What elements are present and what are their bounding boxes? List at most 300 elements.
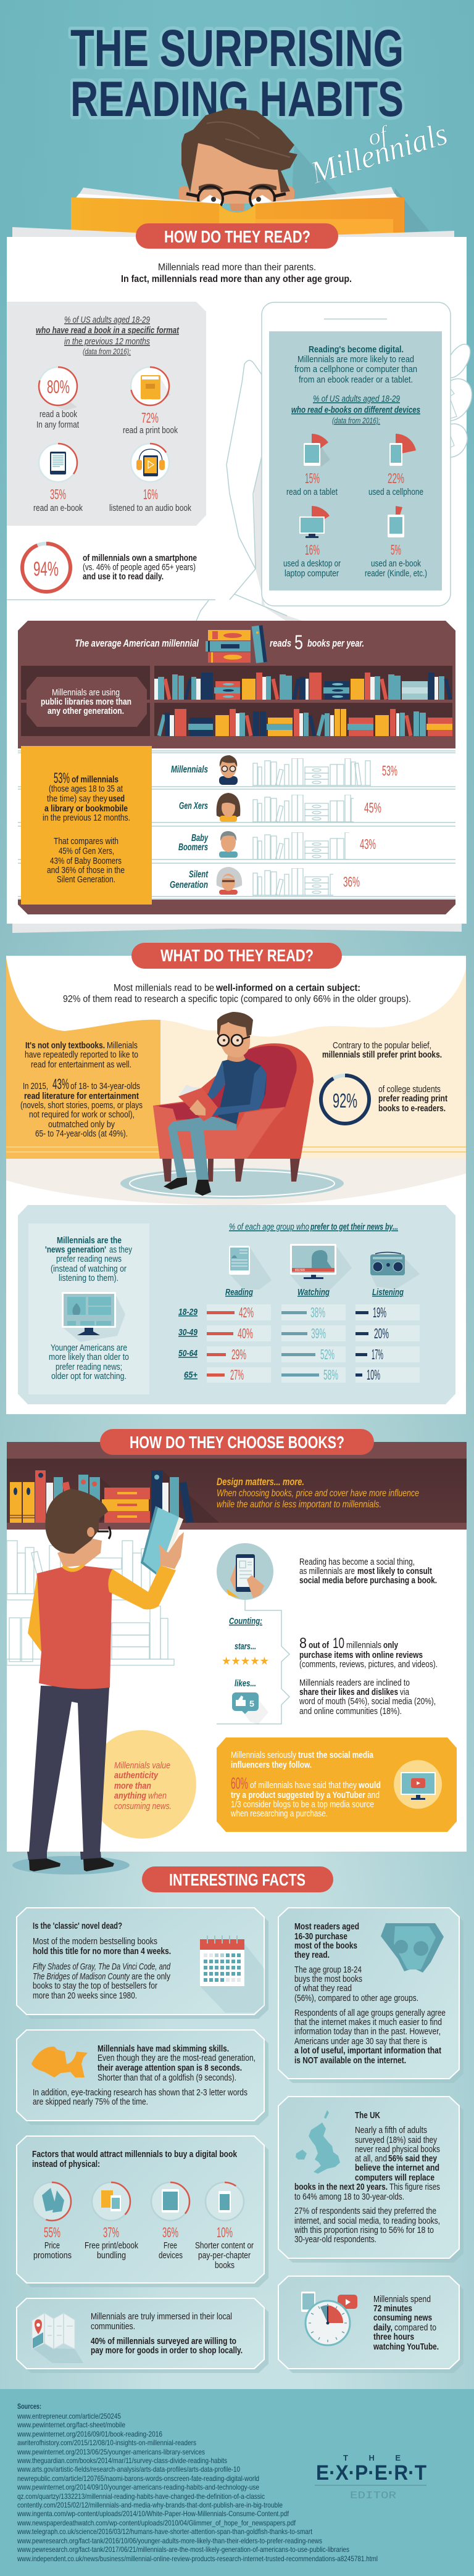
panel: local communities: communities. [91,2321,135,2332]
factor: bundling 37%: 37% [103,2224,119,2240]
text box: news generation: more likely than older to [49,1352,129,1362]
stat: desktop 16%: 16% [305,542,320,558]
callout: public libraries [27,677,147,727]
chart: news preference by age: 58% [323,1367,338,1383]
panel: news consumption time: compared to [394,2322,436,2333]
icon: reading tablet: Reading [225,1287,253,1298]
chart: news preference by age: 18-29 [178,1307,198,1317]
text: online reviews: 8 [299,1635,307,1652]
row: gen xers 45%: 45% [364,800,381,816]
text: print books: Contrary to the popular belief, [333,1040,431,1051]
text box: news generation: prefer reading news; [56,1362,122,1372]
stat: audio book 16%: 16% [143,486,158,502]
subtitle: of Millennials: of [365,121,393,151]
factor: bundling 37%: Free print/ebook [85,2240,138,2251]
counting: stars and likes [222,1616,269,1725]
panel: the UK: books in the next 20 years. [294,2182,388,2192]
illustration: man holding a book [12,1489,184,1874]
panel: the UK: believe the internet and [355,2163,439,2173]
section heading: how do they choose books: HOW DO THEY CHOOSE BOOKS? [130,1433,344,1452]
stat: desktop 16% [283,506,341,579]
text: entertainment reading: have repeatedly reported to like to [25,1050,138,1060]
icon: calendar [200,1936,264,2013]
text: entertainment reading [20,1040,143,1139]
text: online reviews: purchase items with online reviews [299,1650,423,1660]
icon: goldfish [31,2047,88,2077]
row: silent generation 36% [170,867,371,895]
panel: the UK: 27% of respondents said they preferred the [294,2206,436,2216]
panel: how do they read [7,223,467,933]
panel: classic novel: Is the 'classic' novel dead? [33,1921,122,1931]
factor: shorter content 10%: books [215,2260,235,2271]
text: online reviews: millennials [346,1640,381,1650]
counting: stars and likes: likes... [235,1678,256,1689]
panel: who purchases books [278,1908,464,2083]
intro text: 92% of them read to research a specific topic (compared to only 66% in the older groups). [63,994,411,1004]
factor: shorter content 10%: Shorter content or [195,2240,254,2251]
footer band [0,2389,474,2576]
text: online reviews: word of mouth (54%), social media (20%), [299,1696,436,1707]
row: baby boomers 43%: 43% [360,836,376,852]
stat: smartphone ownership 94%: 94% [33,558,59,580]
icon: fanned bills [381,1923,444,1973]
panel: phone with digital reading stats [262,302,451,606]
icon: five stars: ★★★★★ [222,1655,269,1668]
chart: news preference by age: 40% [238,1325,253,1341]
phone screen text: from a cellphone or computer than [294,364,417,375]
factor: bundling 37%: bundling [97,2250,126,2261]
text box: news generation: prefer reading news [56,1254,122,1264]
heading: books per year: The average American millennial [75,637,199,649]
sources list: www.telegraph.co.uk/science/2016/03/12/humans-have-shorter-attention-span-than-goldfish-thanks-to-smart [17,2527,313,2536]
panel: library use callout: Silent Generation. [57,874,115,885]
text: social thing: social media before purchasing a book. [299,1575,437,1586]
sources list: qz.com/quartzy/1332213/millennial-reading-habits-have-changed-the-definition-of-a-classic [17,2492,265,2501]
counting: stars and likes: Counting: [229,1616,262,1626]
panel: library use callout: used [109,793,125,804]
connector line [217,1600,289,1724]
stat: college students 92%: 92% [333,1090,357,1112]
panel: library use callout: of millennials [72,774,118,785]
logo: the expert editor [315,2453,426,2502]
row: silent generation 36%: Generation [170,880,208,890]
text: entertainment reading: It's not only textbooks. [25,1040,105,1051]
panel: who purchases books: (56%), compared to other age groups. [294,1993,418,2003]
panel: who purchases books: Americans under age 30 say that there is [294,2036,427,2047]
text: online reviews: Millennials readers are inclined to [299,1678,410,1688]
text box: news generation: listening to them). [59,1273,118,1283]
row: baby boomers 43%: Baby [191,833,209,843]
sources list: www.ingenta.com/wp-content/uploads/2014/10/White-Paper-How-Millennials-Consume-Content.pdf [17,2509,289,2518]
row: millennials 53%: 53% [382,763,397,779]
text: entertainment reading: read literature for entertainment [24,1091,139,1101]
text: print books [322,1040,442,1060]
stat: tablet 15% [286,434,338,497]
stat: print book 72% [123,367,178,436]
logo: the expert editor: T H E [343,2453,401,2462]
callout: authenticity: more than [114,1781,151,1791]
callout: influencers: of millennials have said that they [250,1780,357,1791]
sources list: contently.com/2015/02/12/millennials-and-media-why-brands-that-dont-publish-are-in-big-trouble [17,2501,283,2509]
stat: cellphone 22%: used a cellphone [368,487,423,497]
panel heading [36,315,180,356]
chart: news preference by age: 39% [311,1325,326,1341]
panel: who purchases books: information today than in the past. However, [294,2026,441,2037]
bookshelf with books [10,1470,219,1523]
illustration: man reading in an armchair [120,1012,344,1199]
text: social thing [299,1557,437,1586]
factor: free devices 36%: Free [164,2240,177,2251]
text: social thing: Reading has become a social thing, [299,1557,415,1567]
section heading: what do they read [131,943,342,969]
chart: news preference by age: 29% [231,1346,246,1362]
heading: books per year: 5 [294,631,303,653]
panel: how do they choose books [7,1429,467,1874]
panel heading: % of US adults aged 18-29 [64,315,150,325]
text: design matters: while the author is less important to millennials. [217,1499,381,1510]
row: baby boomers 43% [178,831,376,859]
callout: public libraries: Millennials are using [52,687,120,698]
sources list: newrepublic.com/article/120765/naomi-barons-words-onscreen-fate-reading-digital-world [17,2474,259,2483]
factor: price promotions 55%: 55% [44,2224,60,2240]
stat: e-reader 5% [365,506,427,579]
sources list: www.theguardian.com/books/2014/mar/11/survey-class-divide-reading-habits [17,2456,227,2465]
text: design matters [217,1476,419,1510]
sources list: www.arts.gov/artistic-fields/research-analysis/arts-data-profiles/arts-data-profile-10 [17,2465,240,2474]
phone screen text: from an ebook reader or a tablet. [299,375,413,385]
section heading: interesting facts [142,1866,333,1892]
panel: who purchases books: The age group 18-24 [294,1965,362,1975]
stat: smartphone ownership 94%: and use it to read daily. [83,571,164,582]
callout: authenticity: authenticity [114,1770,159,1781]
text: online reviews: only [383,1640,399,1650]
illustration: man reading an orange book [71,108,432,238]
panel heading: in the previous 12 months [64,336,150,347]
stat: e-reader 5%: 5% [391,542,401,558]
panel: library use callout: 53% [54,770,70,787]
chart: news preference by age: 27% [230,1367,244,1383]
panel: who purchases books: buys the most books [294,1974,362,1984]
stat: smartphone ownership 94%: of millennials own a smartphone [83,553,197,563]
panel: who purchases books: that the internet makes it much easier to find [294,2017,442,2027]
factor: bundling 37% [85,2182,138,2261]
text: design matters: When choosing books, price and cover have more influence [217,1488,419,1499]
panel: who purchases books: is NOT available on the internet. [294,2055,406,2066]
stat: read a book 80%: read a book [40,409,77,420]
callout: influencers: when researching a purchase. [230,1808,328,1819]
panel: the UK: to 64% among 18 to 30-year-olds. [294,2192,404,2202]
panel: the UK: with this proportion rising to 56% for 18 to [294,2225,434,2235]
sources list: www.pewinternet.org/fact-sheet/mobile [17,2421,125,2429]
callout: influencers [217,1737,457,1832]
panel: book formats [7,302,206,526]
panel: library use callout: 45% of Gen Xers, [59,846,114,856]
text: entertainment reading: of 18- to 34-year-olds [70,1081,140,1091]
stat: college students 92%: of college students [378,1084,441,1095]
callout: influencers: and [367,1790,380,1800]
panel: who purchases books: they read. [294,1950,330,1960]
row: gen xers 45% [179,793,381,822]
phone screen text: (data from 2016): [332,416,380,425]
stat: e-book 35%: read an e-book [33,503,83,513]
sources list: www.pewinternet.org/2014/09/10/younger-americans-reading-habits-and-technology-use [17,2483,259,2491]
text: online reviews: 10 [333,1635,344,1652]
panel: local communities: 40% of millennials surveyed are willing to [91,2336,236,2346]
text: online reviews: share their likes and dislikes [299,1687,398,1697]
chart: news preference by age: 50-64 [178,1348,198,1359]
stat: tablet 15%: 15% [305,470,320,486]
stat: desktop 16%: used a desktop or [283,558,341,569]
stat: audio book 16% [109,444,191,513]
panel: news consumption time: watching YouTube. [373,2342,439,2352]
callout: public libraries: any other generation. [48,706,124,716]
panel: news consumption time: daily, [373,2322,393,2333]
chart: news preference by age: 65+ [184,1370,198,1380]
logo: the expert editor: E·X·P·E·R·T [316,2461,426,2485]
title [70,19,404,127]
chart: news preference by age: 17% [372,1346,383,1362]
sources list [17,2402,378,2563]
text box: news generation: 'news generation' [45,1245,106,1255]
panel: skimming skills: In addition, eye-tracking research has shown that 2-3 letter words [33,2087,247,2098]
panel: news consumption time: Millennials spend [373,2294,431,2305]
panel: library use callout: the time) say they [47,793,107,804]
phone screen text: Reading's become digital. [309,344,404,355]
text: entertainment reading: Millenials [107,1040,138,1051]
text box: news generation: (instead of watching or [51,1264,127,1274]
icon: watching tv [290,1244,352,1298]
phone screen text [291,344,420,425]
callout: public libraries: public libraries more than [41,697,131,707]
panel: news consumption time: three hours [373,2332,414,2342]
icon: folded map [32,2313,83,2363]
text box: news generation: as they [109,1245,132,1255]
stat: smartphone ownership 94%: (vs. 46% of people aged 65+ years) [83,562,196,573]
panel: classic novel [17,1908,268,2019]
panel: the UK: never read physical books [355,2144,440,2155]
panel: the UK: surveyed (18%) said they [355,2135,437,2145]
panel: the UK: at all, and [355,2153,387,2164]
icon: phone in a hand [217,1543,273,1600]
intro text: Millennials read more than their parents. [158,262,316,273]
panel: digital book factors [17,2136,268,2287]
panel: the UK: Nearly a fifth of adults [355,2125,427,2135]
stat: read a book 80% [36,367,80,430]
factor: price promotions 55% [33,2182,72,2261]
section heading: how do they choose books [100,1429,374,1455]
panel: local communities: pay more for goods in order to shop locally. [91,2345,243,2356]
shelf lines [18,751,455,899]
panel: libraries and books per year [18,621,455,914]
stat: smartphone ownership 94% [7,544,215,600]
text: social thing: as millennials are [299,1566,355,1576]
text: entertainment reading: (novels, short stories, poems, or plays [20,1100,143,1111]
callout: authenticity: anything [114,1791,146,1801]
text: entertainment reading: outmatched only by [48,1119,115,1130]
callout: influencers: try a product suggested by a YouTuber [231,1790,365,1800]
sources list: awriterofhistory.com/2015/12/08/10-insights-on-millennial-readers [17,2438,196,2447]
icon: video monitor [394,1760,442,1809]
icon: watching tv: Watching [297,1287,330,1298]
chart: news preference by age: 52% [320,1346,335,1362]
panel: the UK: 56% said they [388,2153,438,2164]
phone screen text: who read e-books on different devices [291,405,420,415]
icon: like badge [232,1692,268,1725]
panel: news consumption time: consuming news [373,2313,432,2323]
text box: news generation: Younger Americans are [51,1343,127,1353]
chart: news preference by age [178,1304,420,1383]
row: baby boomers 43%: Boomers [178,842,208,853]
callout: influencers: influencers they follow. [231,1760,312,1770]
section heading: what do they read: WHAT DO THEY READ? [160,946,314,965]
panel: library use callout: (those ages 18 to 35 at [49,784,123,794]
panel: skimming skills [17,2030,268,2125]
row: millennials 53% [171,755,397,785]
chart: news preference by age: 30-49 [178,1327,198,1338]
panel: library use callout: a library or bookmobile [44,803,128,814]
icon: clock with tablet and video [301,2292,357,2345]
stat: read a book 80%: 80% [47,377,70,397]
text: online reviews: (comments, reviews, pictures, and videos). [299,1659,438,1670]
stat: print book 72%: 72% [141,410,159,426]
panel: classic novel: hold this title for no more than 4 weeks. [33,1946,171,1957]
panel heading: who have read a book in a specific format [36,325,180,336]
panel: skimming skills: Shorter than that of a goldfish (9 seconds). [98,2073,236,2083]
panel: who purchases books: most of the books [294,1940,357,1951]
illustration: hands holding phone [196,341,474,621]
icon: reading tablet [225,1246,272,1298]
icon: like badge: 5 [249,1699,254,1708]
chart: news preference by age: 20% [374,1325,389,1341]
panel: classic novel: are the only [131,1971,170,1982]
text box: news generation [28,1224,149,1394]
panel: classic novel: Most of the modern bestselling books [33,1936,157,1947]
panel heading: (data from 2016): [83,347,131,356]
panel: library use callout: 43% of Baby Boomers [50,856,122,866]
bookshelf [21,666,452,736]
text: entertainment reading: In 2015, [23,1081,48,1091]
heading: books per year [75,631,364,653]
panel: who purchases books: Most readers aged [294,1921,359,1932]
text: online reviews [299,1635,438,1717]
panel: who purchases books: 16-30 purchase [294,1931,347,1942]
panel: local communities: Millennials are truly immersed in their local [91,2311,232,2322]
panel: the UK: computers will replace [355,2172,434,2183]
text: social thing: most likely to consult [357,1566,432,1576]
text: online reviews: and online communities (18%). [299,1706,402,1717]
callout: influencers: Millennials seriously [231,1750,296,1760]
stat: e-reader 5%: used an e-book [371,558,421,569]
panel: classic novel: Fifty Shades of Gray, The Da Vinci Code, and [33,1961,170,1972]
phone screen text: Millennials are more likely to read [297,354,414,365]
panel: news consumption time: 72 minutes [373,2303,412,2314]
icon: listening radio: Listening [372,1287,404,1298]
factor: price promotions 55%: promotions [33,2250,72,2261]
row: silent generation 36%: Silent [189,869,208,880]
sources list: Sources: [17,2402,41,2411]
intro text: well-informed on a certain subject: [215,983,360,993]
text: entertainment reading: 65- to 74-year-olds (at 49%). [35,1129,128,1139]
panel: the UK: 30-year-old respondents. [294,2234,376,2245]
stat: college students 92%: books to e-readers. [378,1103,446,1114]
text: print books: millennials still prefer print books. [322,1050,442,1060]
sources list: www.entrepreneur.com/article/250245 [17,2412,121,2421]
counting: stars and likes: stars... [235,1641,256,1652]
icon: listening radio [370,1253,420,1298]
panel: classic novel: books to stay the top of bestsellers for [33,1981,157,1991]
chart heading: prefer to get their news by... [310,1222,398,1232]
sources list: www.pewresearch.org/fact-tank/2017/06/21/millennials-are-the-most-likely-generation-of-americans-to-use-public-libraries [17,2545,349,2554]
text box: news generation: Millennials are the [57,1235,122,1246]
stat: read a book 80%: In any format [36,420,80,430]
factor: shorter content 10% [195,2182,254,2271]
panel: skimming skills: Even though they are the most-read generation, [98,2053,256,2063]
background: outlined bookshelf [7,1541,174,1665]
panel: library use callout: That compares with [54,836,118,847]
phone screen text: % of US adults aged 18-29 [313,394,401,404]
stat: e-reader 5%: reader (Kindle, etc.) [365,568,427,579]
panel: the UK: This figure rises [389,2182,440,2192]
stat: cellphone 22%: 22% [388,470,404,486]
sources list: www.pewresearch.org/fact-tank/2016/10/06/younger-adults-more-likely-than-their-elders-to-prefer-reading-news [17,2537,322,2545]
text: online reviews: out of [309,1640,330,1650]
callout: authenticity: when [148,1791,167,1801]
panel: who purchases books: of what they read [294,1983,352,1994]
panel: the UK [278,2097,464,2263]
panel: library use callout: in the previous 12 months. [43,813,130,823]
section heading: interesting facts: INTERESTING FACTS [169,1870,306,1889]
section heading: how do they read [136,223,338,249]
sources list: www.pewinternet.org/2013/06/25/younger-americans-library-services [17,2448,205,2456]
stat: print book 72%: read a print book [123,425,178,436]
panel: what do they read [6,943,466,1414]
panel: the UK: internet, and social media, to reading books, [294,2216,440,2226]
panel: news consumption time [278,2276,464,2373]
callout: influencers: 1/3 consider blogs to be a top media source [231,1799,374,1810]
callout: influencers: trust the social media [298,1750,374,1760]
chart: news preference by age: 42% [239,1304,254,1320]
icon: UK map [296,2110,340,2174]
intro text [63,983,411,1004]
sources list: www.independent.co.uk/news/business/millennial-online-review-products-research-internet-trusted-recommendations-a8245781.html [17,2554,378,2563]
chart heading: % of each age group who [229,1222,309,1232]
stat: college students 92%: prefer reading print [378,1093,447,1104]
text: entertainment reading: read for entertainment as well. [31,1059,131,1070]
panel: who purchases books: a lot of useful, important information that [294,2045,441,2056]
chart: news preference by age: 38% [310,1304,325,1320]
subtitle: of Millennials: Millennials [306,116,452,191]
text: design matters: Design matters... more. [217,1476,304,1488]
intro text: In fact, millennials read more than any other age group. [121,274,352,284]
stat: e-book 35% [33,444,83,513]
logo: the expert editor: EDITOR [350,2490,396,2502]
row: silent generation 36%: 36% [343,874,360,890]
callout: authenticity: consuming news. [114,1801,172,1812]
panel: skimming skills: Millennials have mad skimming skills. [98,2044,229,2054]
text: entertainment reading: not required for work or school), [29,1109,135,1120]
chart heading [229,1222,398,1232]
stat: desktop 16%: laptop computer [285,568,339,579]
callout: influencers: 60% [231,1774,248,1792]
stat: audio book 16%: listened to an audio book [109,503,191,513]
icon: stack of books [206,625,267,663]
callout: authenticity: Millennials value [114,1760,170,1771]
sources list: www.newspaperdeathwatch.com/wp-content/uploads/2010/04/Glimmer_of_hope_for_newspapers.pdf [17,2519,296,2527]
panel: news generation [18,1205,455,1404]
factor: free devices 36% [151,2182,189,2261]
factor: shorter content 10%: pay-per-chapter [198,2250,251,2261]
factor: free devices 36%: 36% [162,2224,178,2240]
